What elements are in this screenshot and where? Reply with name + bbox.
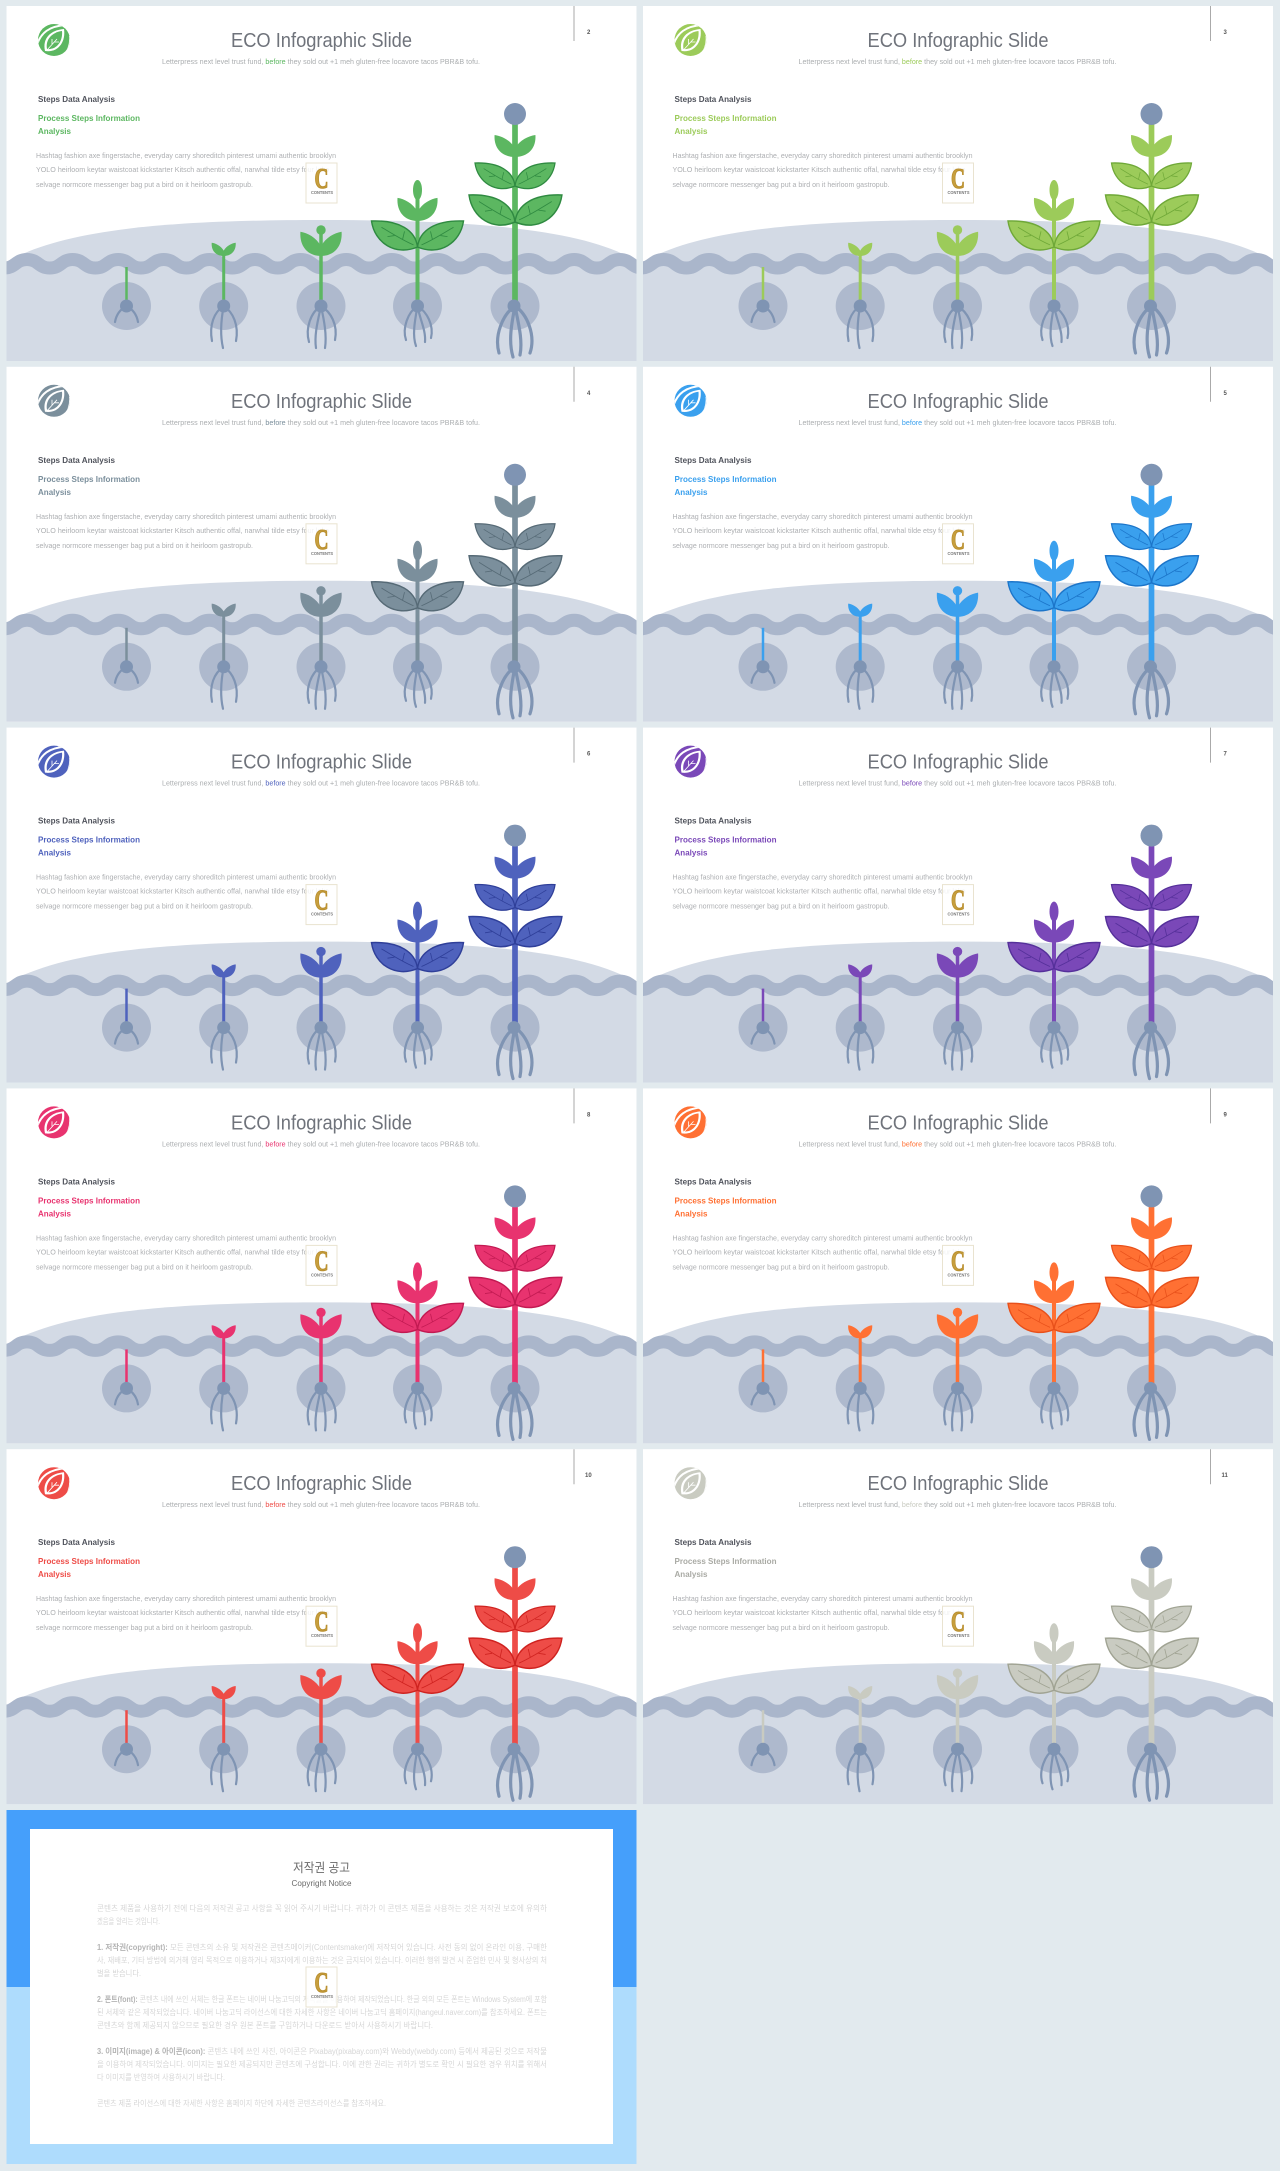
copyright clause 3: 3. 이미지(image) & 아이콘(icon): 콘텐츠 내에 쓰인 사진, 아이콘은 Pixabay(pixabay.com)와 Webdy(webdy.com) 등에서 제공된 것으로 저작물 (97, 2046, 547, 2056)
watermark badge (306, 1245, 337, 1285)
subheading: process steps: Process Steps Information (38, 1556, 140, 1566)
page number (574, 1088, 591, 1123)
page number (574, 728, 591, 763)
title: ECO Infographic Slide (868, 751, 1048, 774)
body text: Hashtag fashion axe fingerstache, everyday carry shoreditch pinterest umami authentic brooklyn (36, 1594, 336, 1603)
subheading: process steps: Analysis (674, 487, 708, 497)
subheading: process steps: Process Steps Information (38, 113, 140, 123)
panel: copyright notice (6, 1810, 636, 2164)
subheading: process steps: Process Steps Information (38, 835, 140, 845)
watermark badge: CONTENTS (948, 551, 970, 556)
plant stage 2 (199, 964, 248, 1070)
ground with wave (618, 581, 1280, 723)
body text: selvage normcore messenger bag put a bird on it heirloom gastropub. (672, 1623, 890, 1632)
watermark badge (306, 524, 337, 564)
watermark badge (942, 163, 974, 203)
icon: leaf logo (36, 1106, 70, 1140)
page number (574, 1449, 592, 1484)
plant stage 1 (738, 267, 788, 330)
copyright title: 저작권 공고 (293, 1861, 350, 1875)
watermark badge: C (314, 524, 328, 556)
subtitle: Letterpress next level trust fund, before they sold out +1 meh gluten-free locavore tacos PBR&B tofu. (798, 779, 1116, 788)
subheading: process steps: Analysis (674, 1569, 708, 1579)
body text: YOLO heirloom keytar waistcoat kickstarter Kitsch authentic offal, narwhal tilde etsy four loko (672, 887, 966, 896)
plant stage 2 (199, 1686, 248, 1791)
panel: slide 6 indigo (6, 728, 636, 1082)
plant stage 4 (372, 541, 464, 707)
copyright clause 1 (97, 1942, 548, 1978)
plant stage 5 (1106, 1185, 1198, 1439)
body text: selvage normcore messenger bag put a bird on it heirloom gastropub. (36, 902, 253, 911)
plant stage 3 (933, 225, 982, 348)
plant stage 4 (1008, 1262, 1100, 1428)
watermark badge (942, 1606, 974, 1646)
panel: slide 5 blue (618, 367, 1280, 723)
page number (1210, 1449, 1229, 1484)
subtitle: Letterpress next level trust fund, before they sold out +1 meh gluten-free locavore tacos PBR&B tofu. (162, 57, 480, 66)
panel: slide 7 purple (618, 728, 1280, 1084)
ground with wave (6, 1663, 636, 1804)
panel: slide 9 orange (618, 1088, 1280, 1444)
subheading: process steps (674, 474, 776, 497)
heading: steps data analysis: Steps Data Analysis (674, 1176, 752, 1186)
plant stage 2 (836, 1686, 885, 1791)
subheading: process steps: Analysis (38, 1208, 71, 1218)
icon: leaf logo (36, 24, 70, 58)
icon: leaf logo (672, 24, 707, 58)
subheading: process steps (674, 113, 776, 136)
watermark badge: C (951, 885, 965, 917)
body text (36, 512, 336, 550)
body text (36, 873, 336, 911)
page number: 9 (1224, 1112, 1228, 1118)
page number: 6 (587, 752, 591, 758)
plant stage 1 (102, 267, 151, 330)
plant stage 1 (738, 1349, 788, 1412)
plant stage 4 (1008, 180, 1100, 346)
copyright intro (97, 1903, 548, 1926)
plant stage 3 (933, 947, 982, 1070)
subheading: process steps: Process Steps Information (38, 1195, 140, 1205)
ground with wave (618, 220, 1280, 362)
panel: slide 2 green (6, 6, 636, 361)
watermark badge: CONTENTS (311, 1994, 333, 1999)
subtitle: Letterpress next level trust fund, before they sold out +1 meh gluten-free locavore tacos PBR&B tofu. (162, 1500, 480, 1509)
body text: YOLO heirloom keytar waistcoat kickstarter Kitsch authentic offal, narwhal tilde etsy four loko (36, 1247, 329, 1256)
watermark badge: C (314, 1606, 328, 1638)
watermark badge: C (951, 1245, 965, 1277)
plant stage 5 (469, 1185, 562, 1439)
plant stage 2 (836, 1325, 885, 1430)
watermark badge: CONTENTS (311, 1272, 333, 1277)
watermark badge: C (314, 1245, 328, 1277)
page number (1210, 728, 1228, 763)
body text: Hashtag fashion axe fingerstache, everyday carry shoreditch pinterest umami authentic brooklyn (36, 1233, 336, 1242)
copyright clause 1: 사, 재배포, 기타 방법에 의거해 영리 목적으로 이용하거나 제3자에게 이용하는 것은 금지되어 있습니다. 이러한 행위 발견 시 준엄한 민사 및 형사상의 처 (97, 1955, 547, 1965)
copyright intro: 겠음을 알리는 것입니다. (97, 1916, 160, 1926)
subtitle: Letterpress next level trust fund, before they sold out +1 meh gluten-free locavore tacos PBR&B tofu. (798, 1500, 1116, 1509)
subheading: process steps (38, 474, 140, 497)
title: ECO Infographic Slide (868, 29, 1048, 52)
body text: selvage normcore messenger bag put a bird on it heirloom gastropub. (672, 1262, 890, 1271)
page number: 11 (1222, 1473, 1229, 1479)
icon: leaf logo (672, 1467, 707, 1501)
title: ECO Infographic Slide (868, 1472, 1048, 1495)
title: ECO Infographic Slide (231, 29, 412, 52)
body text (672, 512, 972, 550)
subtitle: Letterpress next level trust fund, before they sold out +1 meh gluten-free locavore tacos PBR&B tofu. (798, 418, 1116, 427)
ground with wave (6, 220, 636, 361)
plant stage 3 (933, 1308, 982, 1430)
page number: 4 (587, 391, 591, 397)
copyright clause 1: 1. 저작권(copyright): 모든 콘텐츠의 소유 및 저작권은 콘텐츠메이커(Contentsmaker)에 저작되어 있습니다. 사전 동의 없이 온라인 이용, 구매한 (97, 1942, 548, 1952)
subheading: process steps (38, 1556, 140, 1579)
plant stage 2 (836, 243, 885, 348)
plant stage 4 (1008, 902, 1100, 1068)
plant stage 4 (1008, 1623, 1100, 1789)
body text: YOLO heirloom keytar waistcoat kickstarter Kitsch authentic offal, narwhal tilde etsy four loko (36, 526, 329, 535)
body text: Hashtag fashion axe fingerstache, everyday carry shoreditch pinterest umami authentic brooklyn (672, 1594, 972, 1603)
panel: slide 3 lime (618, 6, 1280, 362)
ground with wave (618, 1663, 1280, 1805)
subheading: process steps: Analysis (674, 848, 708, 858)
subtitle: Letterpress next level trust fund, before they sold out +1 meh gluten-free locavore tacos PBR&B tofu. (162, 779, 480, 788)
ground with wave (618, 1302, 1280, 1444)
subtitle: Letterpress next level trust fund, before they sold out +1 meh gluten-free locavore tacos PBR&B tofu. (162, 1139, 480, 1148)
plant stage 5 (1106, 103, 1198, 357)
plant stage 1 (102, 989, 151, 1052)
body text (672, 1233, 972, 1271)
body text (672, 1594, 972, 1632)
plant stage 3 (296, 586, 346, 709)
body text: Hashtag fashion axe fingerstache, everyday carry shoreditch pinterest umami authentic brooklyn (672, 512, 972, 521)
heading: steps data analysis: Steps Data Analysis (38, 455, 115, 465)
copyright clause 2 (97, 1994, 548, 2030)
ground with wave (6, 580, 636, 722)
watermark badge: CONTENTS (948, 1272, 970, 1277)
plant stage 2 (199, 243, 248, 348)
title: ECO Infographic Slide (868, 1111, 1048, 1134)
watermark badge: CONTENTS (948, 912, 970, 917)
watermark badge: CONTENTS (311, 551, 333, 556)
plant stage 1 (102, 628, 151, 691)
body text: Hashtag fashion axe fingerstache, everyday carry shoreditch pinterest umami authentic brooklyn (672, 1233, 972, 1242)
watermark badge (942, 885, 974, 925)
page number: 2 (587, 30, 591, 36)
plant stage 5 (1106, 1546, 1198, 1800)
page number (1210, 1088, 1228, 1123)
title: ECO Infographic Slide (231, 1111, 412, 1134)
watermark badge (306, 1606, 337, 1646)
page number: 5 (1224, 391, 1228, 397)
icon: leaf logo (672, 746, 707, 780)
title: ECO Infographic Slide (231, 1472, 412, 1495)
watermark badge: C (314, 885, 328, 917)
watermark badge (306, 1967, 337, 2007)
body text: Hashtag fashion axe fingerstache, everyday carry shoreditch pinterest umami authentic brooklyn (36, 512, 336, 521)
subheading: process steps (38, 1195, 140, 1218)
heading: steps data analysis: Steps Data Analysis (38, 94, 115, 104)
icon: leaf logo (672, 1106, 707, 1140)
body text: Hashtag fashion axe fingerstache, everyday carry shoreditch pinterest umami authentic brooklyn (36, 873, 336, 882)
subheading: process steps (38, 835, 140, 858)
body text: YOLO heirloom keytar waistcoat kickstarter Kitsch authentic offal, narwhal tilde etsy four loko (36, 1608, 329, 1617)
page number (574, 367, 591, 402)
body text: YOLO heirloom keytar waistcoat kickstarter Kitsch authentic offal, narwhal tilde etsy four loko (672, 165, 966, 174)
copyright title: Copyright Notice (292, 1878, 352, 1888)
copyright footer line: 콘텐츠 제품 라이선스에 대한 자세한 사항은 홈페이지 하단에 자세한 콘텐츠라이선스를 참조하세요. (97, 2098, 386, 2108)
ground with wave (618, 942, 1280, 1084)
body text (36, 1594, 336, 1632)
copyright clause 2: 된 서체와 같은 제작되었습니다. 네이버 나눔고딕 라이선스에 대한 자세한 사항은 네이버 나눔고딕 홈페이지(hangeul.naver.com)를 참조하세요. 폰트는 (97, 2007, 547, 2017)
body text: selvage normcore messenger bag put a bird on it heirloom gastropub. (672, 541, 890, 550)
plant stage 5 (469, 464, 562, 718)
heading: steps data analysis: Steps Data Analysis (38, 1537, 115, 1547)
watermark badge (306, 885, 337, 925)
copyright clause 3 (97, 2046, 547, 2082)
plant stage 4 (1008, 541, 1100, 707)
plant stage 3 (296, 1308, 346, 1430)
body text: selvage normcore messenger bag put a bird on it heirloom gastropub. (672, 180, 890, 189)
heading: steps data analysis: Steps Data Analysis (38, 1176, 115, 1186)
body text (36, 1233, 336, 1271)
heading: steps data analysis: Steps Data Analysis (674, 455, 752, 465)
body text: selvage normcore messenger bag put a bird on it heirloom gastropub. (36, 1262, 253, 1271)
plant stage 4 (372, 180, 464, 346)
body text: selvage normcore messenger bag put a bird on it heirloom gastropub. (672, 902, 890, 911)
heading: steps data analysis: Steps Data Analysis (674, 94, 752, 104)
watermark badge: C (951, 524, 965, 556)
watermark badge: C (314, 163, 328, 195)
watermark badge: CONTENTS (311, 1633, 333, 1638)
subheading: process steps: Analysis (38, 848, 71, 858)
page number (574, 6, 591, 41)
plant stage 2 (199, 1325, 248, 1430)
subheading: process steps: Analysis (674, 1208, 708, 1218)
body text: YOLO heirloom keytar waistcoat kickstarter Kitsch authentic offal, narwhal tilde etsy four loko (672, 1247, 966, 1256)
watermark badge: C (314, 1967, 328, 1999)
body text: YOLO heirloom keytar waistcoat kickstarter Kitsch authentic offal, narwhal tilde etsy four loko (36, 165, 329, 174)
subtitle: Letterpress next level trust fund, before they sold out +1 meh gluten-free locavore tacos PBR&B tofu. (162, 418, 480, 427)
title: ECO Infographic Slide (868, 390, 1048, 413)
subtitle: Letterpress next level trust fund, before they sold out +1 meh gluten-free locavore tacos PBR&B tofu. (798, 57, 1116, 66)
subheading: process steps: Process Steps Information (674, 835, 776, 845)
watermark badge: CONTENTS (311, 912, 333, 917)
plant stage 3 (296, 1668, 346, 1791)
panel: slide 8 pink (6, 1088, 636, 1443)
body text: selvage normcore messenger bag put a bird on it heirloom gastropub. (36, 1623, 253, 1632)
watermark badge: C (951, 163, 965, 195)
copyright intro: 콘텐츠 제품을 사용하기 전에 다음의 저작권 공고 사항을 꼭 읽어 주시기 바랍니다. 귀하가 이 콘텐츠 제품을 사용하는 것은 저작권 보호에 유의하 (97, 1903, 548, 1913)
icon: leaf logo (36, 746, 70, 780)
body text: YOLO heirloom keytar waistcoat kickstarter Kitsch authentic offal, narwhal tilde etsy four loko (672, 1608, 966, 1617)
watermark badge: C (951, 1606, 965, 1638)
plant stage 1 (102, 1710, 151, 1773)
subheading: process steps: Process Steps Information (674, 1195, 776, 1205)
subheading: process steps (674, 1556, 776, 1579)
copyright clause 3: 을 이용하여 제작되었습니다. 이미지는 필요한 제공되지만 콘텐츠에 구성합니다. 이에 관한 권리는 귀하가 별도로 확인 시 필요한 경우 위치를 위해서 (97, 2059, 547, 2069)
heading: steps data analysis: Steps Data Analysis (38, 816, 115, 826)
plant stage 3 (296, 225, 346, 348)
body text (36, 151, 336, 189)
subheading: process steps: Analysis (674, 126, 708, 136)
subheading: process steps: Analysis (38, 487, 71, 497)
plant stage 5 (469, 103, 562, 357)
body text: Hashtag fashion axe fingerstache, everyday carry shoreditch pinterest umami authentic brooklyn (672, 151, 972, 160)
watermark badge (306, 163, 337, 203)
plant stage 1 (102, 1349, 151, 1412)
watermark badge: CONTENTS (948, 1633, 970, 1638)
body text: YOLO heirloom keytar waistcoat kickstarter Kitsch authentic offal, narwhal tilde etsy four loko (672, 526, 966, 535)
watermark badge (942, 524, 974, 564)
page number: 3 (1224, 30, 1228, 36)
plant stage 5 (469, 825, 562, 1079)
plant stage 4 (372, 1623, 464, 1789)
copyright clause 1: 벌을 받습니다. (97, 1968, 141, 1978)
body text: Hashtag fashion axe fingerstache, everyday carry shoreditch pinterest umami authentic brooklyn (36, 151, 336, 160)
watermark badge: CONTENTS (948, 190, 970, 195)
plant stage 3 (933, 1668, 982, 1791)
icon: leaf logo (36, 1467, 70, 1501)
subtitle: Letterpress next level trust fund, before they sold out +1 meh gluten-free locavore tacos PBR&B tofu. (798, 1139, 1116, 1148)
icon: leaf logo (672, 385, 707, 419)
copyright clause 3: 다 이미지를 반영하여 사용하시기 바랍니다. (97, 2072, 225, 2082)
heading: steps data analysis: Steps Data Analysis (674, 1537, 752, 1547)
plant stage 3 (296, 947, 346, 1070)
body text (672, 873, 972, 911)
plant stage 1 (738, 628, 788, 691)
subheading: process steps (674, 1195, 776, 1218)
body text: selvage normcore messenger bag put a bird on it heirloom gastropub. (36, 180, 253, 189)
page number (1210, 6, 1228, 41)
title: ECO Infographic Slide (231, 390, 412, 413)
body text: Hashtag fashion axe fingerstache, everyday carry shoreditch pinterest umami authentic brooklyn (672, 873, 972, 882)
watermark badge: CONTENTS (311, 190, 333, 195)
subheading: process steps: Process Steps Information (674, 113, 776, 123)
plant stage 5 (1106, 464, 1198, 718)
panel: slide 10 red (6, 1449, 636, 1804)
plant stage 1 (738, 989, 788, 1052)
body text: selvage normcore messenger bag put a bird on it heirloom gastropub. (36, 541, 253, 550)
subheading: process steps: Analysis (38, 126, 71, 136)
plant stage 2 (199, 604, 248, 709)
plant stage 2 (836, 964, 885, 1070)
icon: leaf logo (36, 385, 70, 419)
copyright clause 2: 2. 폰트(font): 콘텐츠 내에 쓰인 서체는 한글 폰트는 네이버 나눔고딕의 저작물을 이용하여 제작되었습니다. 한글 외의 모든 폰트는 Windows System에 포함 (97, 1994, 548, 2004)
page number: 7 (1224, 752, 1228, 758)
ground with wave (6, 942, 636, 1082)
subheading: process steps (674, 835, 776, 858)
plant stage 5 (469, 1546, 562, 1800)
plant stage 5 (1106, 825, 1198, 1079)
panel: slide 11 grey (618, 1449, 1280, 1805)
page number (1210, 367, 1228, 402)
title: ECO Infographic Slide (231, 751, 412, 774)
subheading: process steps: Process Steps Information (674, 1556, 776, 1566)
body text (672, 151, 972, 189)
heading: steps data analysis: Steps Data Analysis (674, 816, 752, 826)
plant stage 4 (372, 1262, 464, 1428)
subheading: process steps (38, 113, 140, 136)
panel: slide 4 slate (6, 366, 636, 722)
page number: 8 (587, 1112, 591, 1118)
copyright title (292, 1861, 352, 1888)
copyright clause 2: 콘텐츠와 함께 제공되지 않으므로 필요한 경우 원본 폰트를 구입하거나 다운로드 받아서 사용하시기 바랍니다. (97, 2020, 433, 2030)
subheading: process steps: Analysis (38, 1569, 71, 1579)
subheading: process steps: Process Steps Information (38, 474, 140, 484)
plant stage 3 (933, 586, 982, 709)
watermark badge (942, 1245, 974, 1285)
body text: YOLO heirloom keytar waistcoat kickstarter Kitsch authentic offal, narwhal tilde etsy four loko (36, 887, 329, 896)
page number: 10 (585, 1473, 592, 1479)
plant stage 2 (836, 604, 885, 709)
plant stage 4 (372, 902, 464, 1068)
subheading: process steps: Process Steps Information (674, 474, 776, 484)
ground with wave (6, 1302, 636, 1444)
plant stage 1 (738, 1710, 788, 1773)
